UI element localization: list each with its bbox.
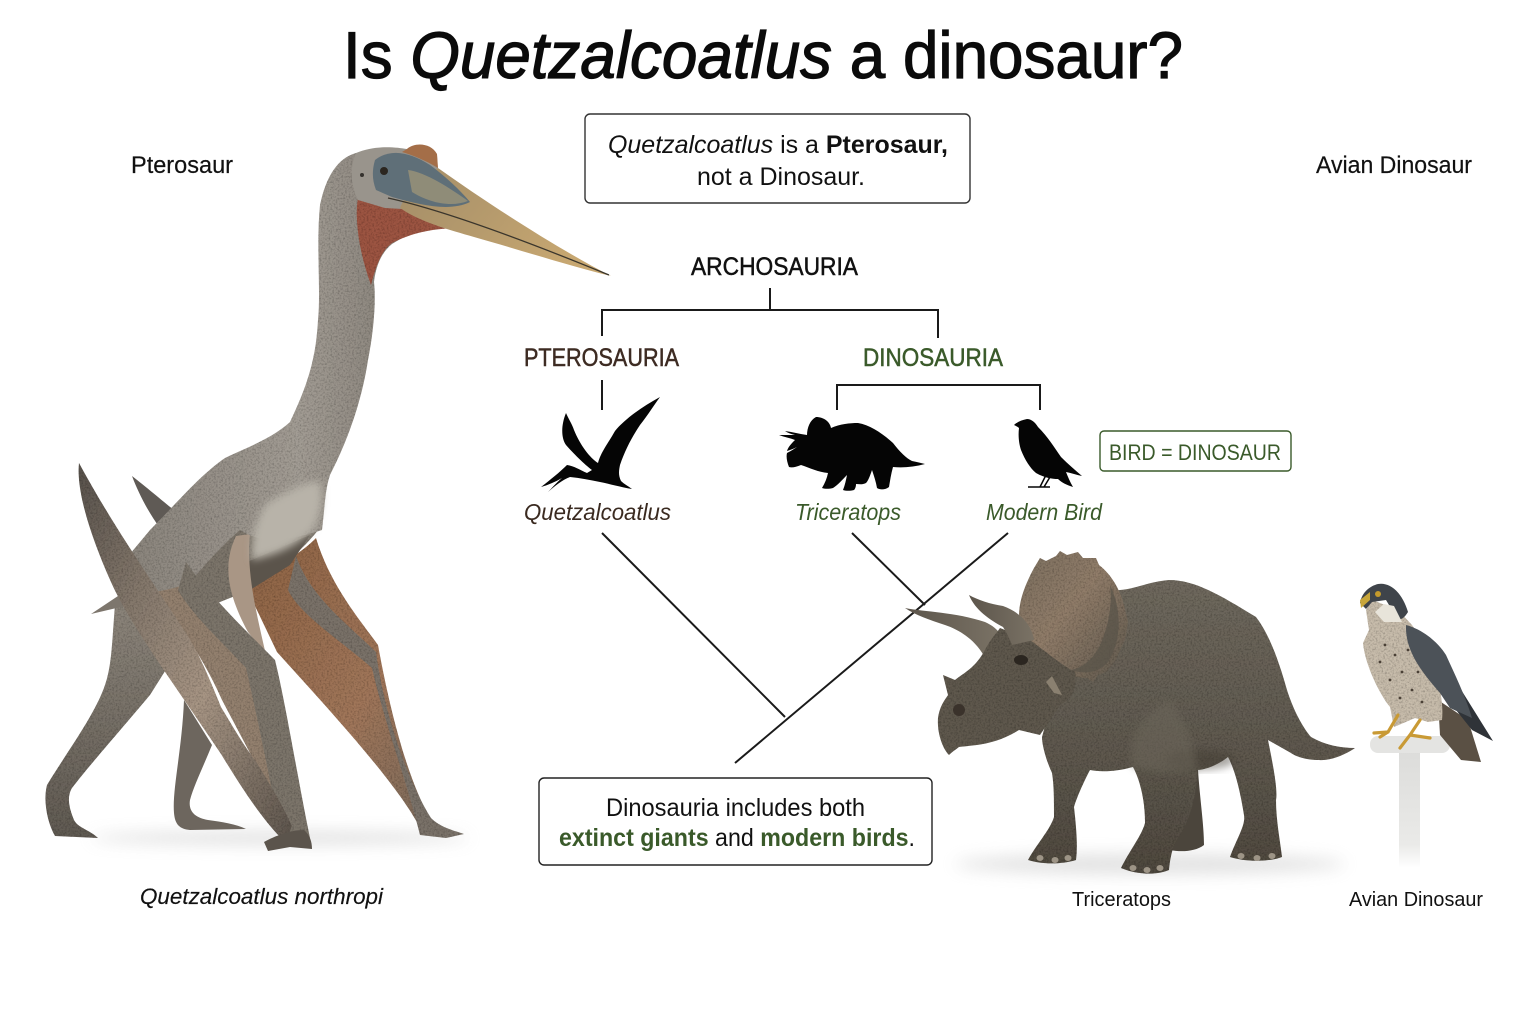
- frill: [1019, 551, 1128, 682]
- beak: [1360, 592, 1370, 608]
- white cheek: [1375, 604, 1402, 622]
- summary box: bottom: extinct giants and modern birds.: [559, 824, 915, 852]
- illustration: Triceratops: [905, 551, 1355, 874]
- summary box: top: [585, 114, 970, 203]
- callout: bird equals dinosaur: BIRD = DINOSAUR: [1109, 440, 1281, 465]
- eye: [1014, 655, 1028, 665]
- nostril: [953, 704, 965, 716]
- wing: [1406, 625, 1472, 718]
- mouth line: [388, 198, 609, 275]
- long brow horn: [905, 608, 1000, 656]
- tail spike: [91, 596, 125, 614]
- ground shadow: [90, 832, 470, 844]
- folded wing: [79, 463, 292, 842]
- summary box: bottom: Dinosauria includes both: [606, 794, 865, 822]
- frill rim: [1070, 585, 1119, 672]
- callout: bird equals dinosaur: [1100, 431, 1291, 471]
- node: Dinosauria: DINOSAURIA: [863, 344, 1003, 372]
- eye: [1375, 591, 1381, 597]
- perch bar: [1370, 736, 1450, 753]
- inner membrane: [150, 570, 288, 825]
- near hind leg: [45, 605, 172, 838]
- beak: [400, 168, 611, 276]
- summary box: top: not a Dinosaur.: [697, 163, 865, 191]
- body and neck: [125, 153, 440, 600]
- head: [1360, 584, 1408, 619]
- summary box: top: Quetzalcoatlus is a Pterosaur,: [608, 131, 948, 159]
- red throat: [357, 198, 462, 285]
- talons: [1374, 715, 1430, 748]
- foot: [264, 830, 312, 851]
- breast speckles: [1379, 644, 1423, 703]
- far wing spike: [132, 476, 174, 528]
- node: Pterosauria: PTEROSAURIA: [524, 344, 679, 372]
- illustration: Quetzalcoatlus: [45, 145, 611, 851]
- belly shade: [240, 535, 310, 590]
- silhouette: modern bird: [1014, 419, 1082, 487]
- front arm: [178, 562, 310, 842]
- label: Triceratops: Triceratops: [795, 499, 901, 525]
- label: pterosaur: Pterosaur: [131, 152, 233, 179]
- head: [352, 145, 438, 210]
- perch post: [1399, 750, 1420, 868]
- right wing limb: [288, 556, 464, 838]
- silhouette: Triceratops: [779, 417, 925, 491]
- forearm highlight: [228, 534, 266, 655]
- second brow horn: [969, 595, 1034, 645]
- face patch: [373, 153, 470, 207]
- nostril: [360, 173, 364, 177]
- right wing membrane: [245, 538, 431, 826]
- shoulder shade: [1131, 700, 1197, 773]
- chest fluff: [252, 482, 322, 560]
- caption: Quetzalcoatlus northropi: Quetzalcoatlus northropi: [140, 884, 384, 909]
- belly shade: [1165, 750, 1235, 770]
- cheek horn: [1046, 676, 1062, 695]
- head: [938, 628, 1076, 755]
- title: Is Quetzalcoatlus a dinosaur?: [343, 18, 1183, 92]
- tail: [1438, 700, 1481, 762]
- node: Archosauria: ARCHOSAURIA: [691, 253, 858, 281]
- eye: [380, 167, 388, 175]
- body and tail: [1028, 580, 1355, 874]
- torso backing: [150, 490, 322, 610]
- crest: [402, 145, 438, 168]
- phylogenetic tree lines: [602, 288, 1040, 763]
- wing tip: [1448, 680, 1493, 741]
- summary box: bottom: [539, 778, 932, 865]
- label: avian dinosaur: Avian Dinosaur: [1316, 152, 1472, 179]
- ground shadow: [955, 854, 1345, 874]
- caption: Triceratops: Triceratops: [1072, 889, 1171, 911]
- far hind leg: [174, 700, 246, 830]
- label: Quetzalcoatlus: Quetzalcoatlus: [524, 499, 671, 525]
- illustration: falcon on perch: [1360, 584, 1493, 868]
- label: Modern Bird: Modern Bird: [986, 499, 1103, 525]
- silhouette: Quetzalcoatlus: [541, 397, 660, 492]
- far legs: [1165, 770, 1204, 851]
- caption: avian dinosaur: Avian Dinosaur: [1349, 889, 1483, 911]
- breast: [1363, 600, 1442, 727]
- toes: [1036, 853, 1276, 873]
